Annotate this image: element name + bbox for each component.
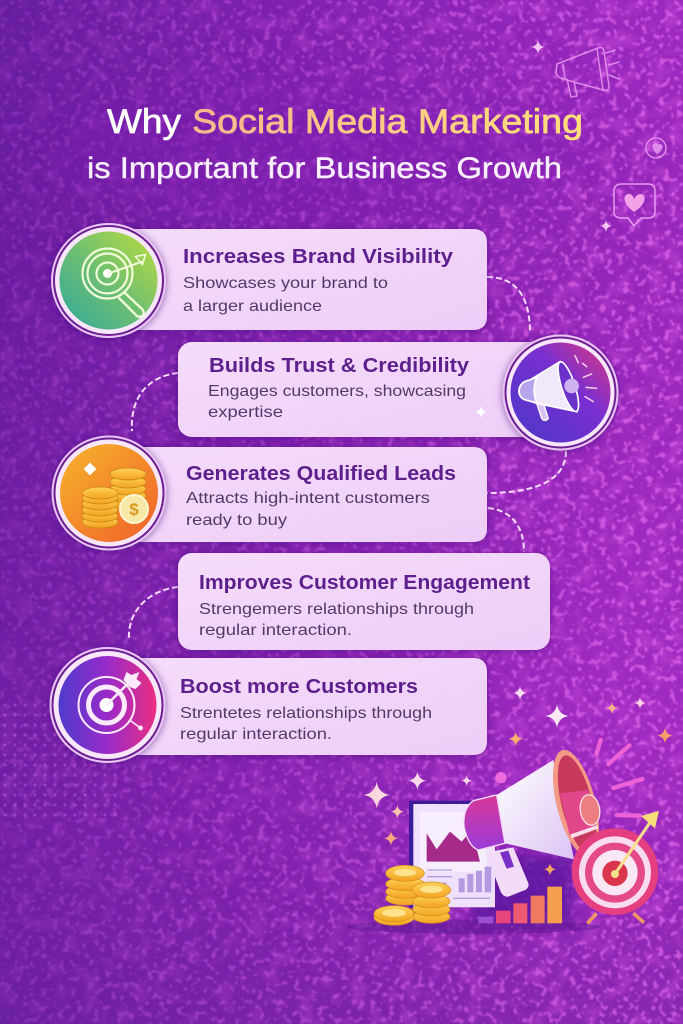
description: Strentetes relationships through xyxy=(180,705,432,722)
description xyxy=(186,490,430,529)
panel: improves customer engagement xyxy=(178,553,550,650)
panel: increases brand visibility xyxy=(130,229,487,330)
decorative icon: heart message xyxy=(614,184,655,226)
description: ready to buy xyxy=(186,512,287,529)
title xyxy=(87,103,583,185)
connector: card 2 to card 3 xyxy=(487,451,566,493)
description xyxy=(180,705,432,743)
description xyxy=(199,601,474,639)
heading: Generates Qualified Leads xyxy=(186,463,456,485)
sparkles xyxy=(513,40,646,728)
decorative icon: outline megaphone xyxy=(556,47,619,97)
title: Why xyxy=(107,103,181,141)
description: regular interaction. xyxy=(199,622,352,639)
panel: builds trust and credibility xyxy=(178,342,578,437)
target xyxy=(572,811,659,923)
decorative icon: chat bubble with heart xyxy=(646,138,666,158)
description: Attracts high-intent customers xyxy=(186,490,430,507)
description: Engages customers, showcasing xyxy=(208,383,466,400)
burst lines xyxy=(597,740,642,816)
icon: bullseye badge xyxy=(50,647,166,763)
heading: Boost more Customers xyxy=(180,676,418,698)
title: is Important for Business Growth xyxy=(87,152,562,185)
heading: Improves Customer Engagement xyxy=(199,572,530,594)
description xyxy=(183,275,388,315)
connector: card 3 to card 4 xyxy=(488,508,524,552)
icon: megaphone badge xyxy=(502,334,618,450)
illustration: megaphone, chart, coins and target xyxy=(347,728,673,934)
connector: card 4 to left xyxy=(129,587,178,640)
description: Strengemers relationships through xyxy=(199,601,474,618)
description xyxy=(208,383,466,421)
chart board xyxy=(409,801,495,907)
icon: gold coins badge xyxy=(52,436,166,550)
description: expertise xyxy=(208,404,283,421)
description: Showcases your brand to xyxy=(183,275,388,292)
connector: card 2 to left xyxy=(132,373,178,431)
icon: magnifier with target xyxy=(51,223,166,338)
coins xyxy=(374,865,451,925)
connector: card 1 to card 2 xyxy=(487,277,530,333)
megaphone xyxy=(464,745,608,897)
sparkles xyxy=(363,728,673,875)
icon: gold coins badge: $ xyxy=(129,500,139,519)
panel: boost more customers xyxy=(130,658,487,755)
heading: Builds Trust & Credibility xyxy=(209,355,470,377)
bars xyxy=(478,887,562,923)
description: a larger audience xyxy=(183,298,322,315)
title: Social Media Marketing xyxy=(192,103,583,141)
heading: Increases Brand Visibility xyxy=(183,246,454,268)
panel: generates qualified leads xyxy=(130,447,487,542)
description: regular interaction. xyxy=(180,726,332,743)
